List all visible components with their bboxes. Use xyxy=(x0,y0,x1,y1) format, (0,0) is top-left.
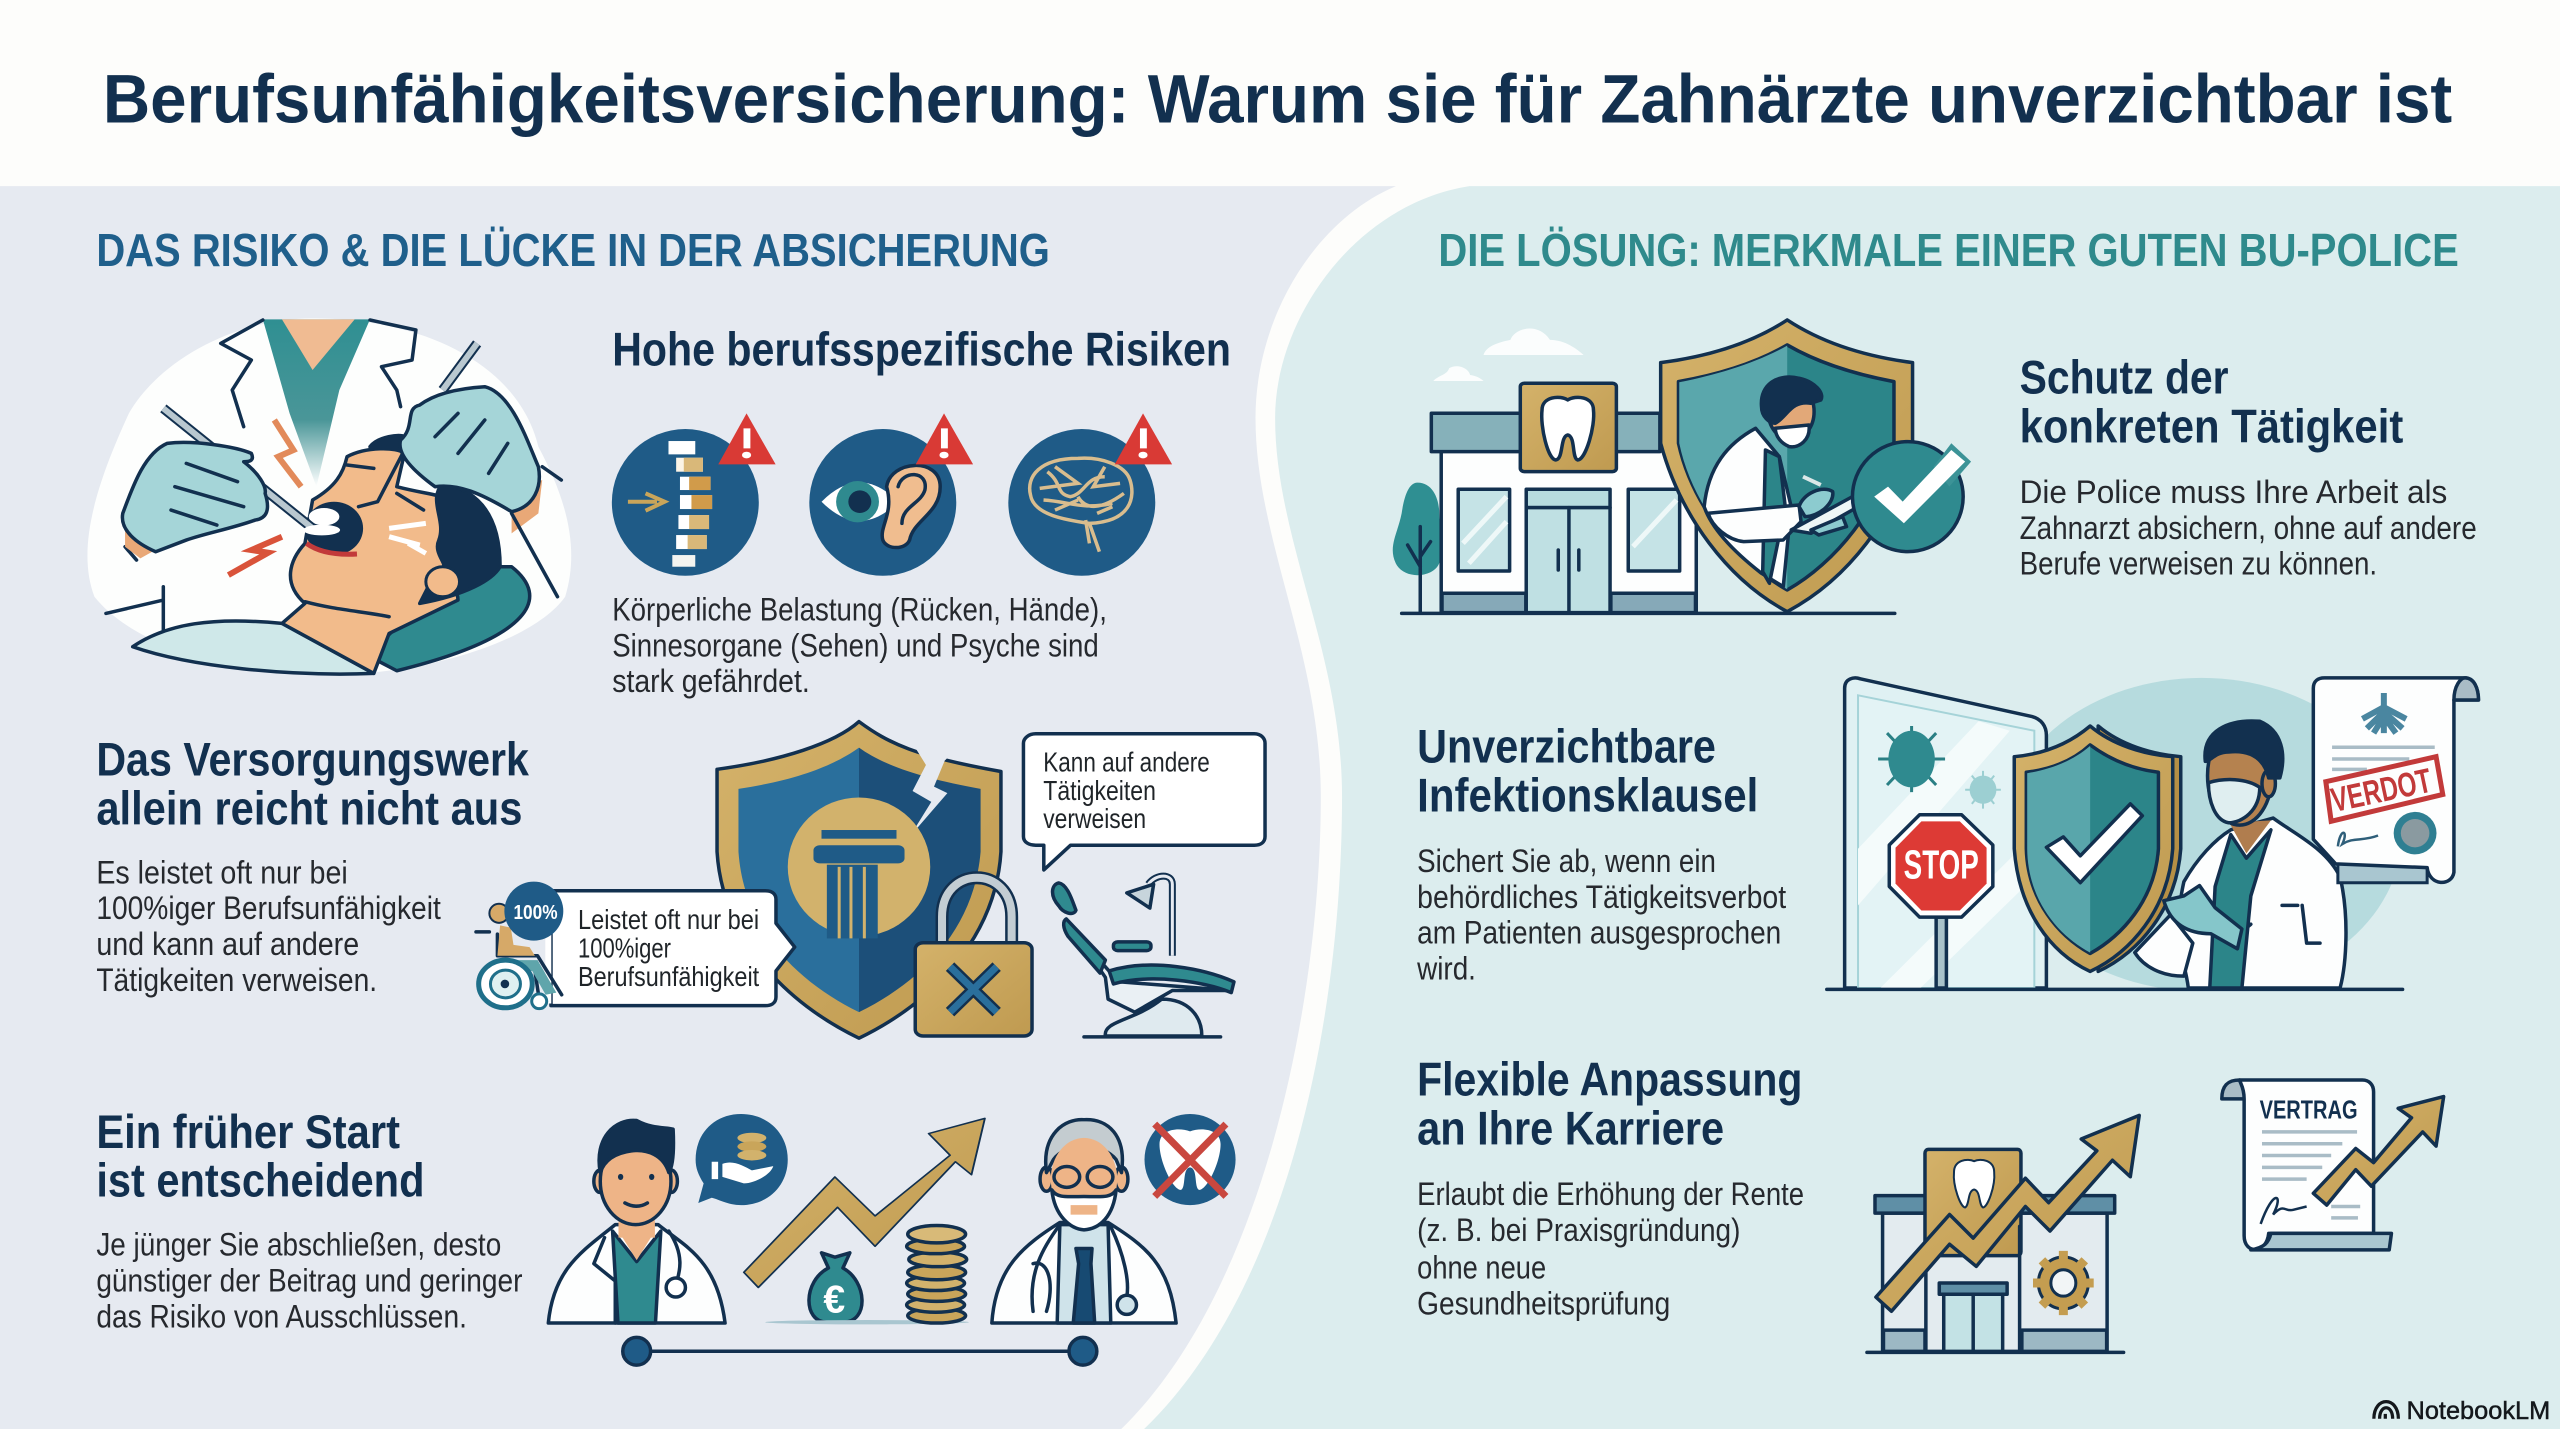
icon: money bag: € xyxy=(823,1279,845,1322)
text: Schutz der konkreten Tätigkeit: Die Police muss Ihre Arbeit als xyxy=(2020,473,2447,510)
chart: rising gold arrow xyxy=(744,1118,985,1288)
text: risks description xyxy=(612,590,1107,699)
illustration: senior dentist xyxy=(992,1120,1176,1323)
text: Unverzichtbare Infektionsklausel: Infektionsklausel xyxy=(1417,769,1758,822)
text: Unverzichtbare Infektionsklausel: Sichert Sie ab, wenn ein xyxy=(1417,842,1716,879)
icon: dental chair xyxy=(1053,876,1234,1037)
illustration: contract: VERTRAG xyxy=(2260,1094,2358,1124)
text: Das Versorgungswerk: Es leistet oft nur bei xyxy=(96,853,348,890)
text: Schutz der konkreten Tätigkeit: Zahnarzt absichern, ohne auf andere xyxy=(2020,509,2477,546)
illustration: infection clause: VERDOT xyxy=(2328,762,2435,820)
text: Ein früher Start xyxy=(96,1106,523,1334)
text: Ein früher Start: das Risiko von Ausschlüssen. xyxy=(96,1297,467,1334)
text: Flexible Anpassung: Erlaubt die Erhöhung der Rente xyxy=(1417,1175,1804,1212)
text: Flexible Anpassung: an Ihre Karriere xyxy=(1417,1102,1724,1155)
text: Flexible Anpassung: (z. B. bei Praxisgründung) xyxy=(1417,1211,1740,1248)
text: risks description: stark gefährdet. xyxy=(612,662,810,699)
icon: coin stack xyxy=(765,1225,969,1324)
callout: other activities xyxy=(1023,734,1265,870)
text: Das Versorgungswerk: Tätigkeiten verweisen. xyxy=(96,961,377,998)
illustration: broken shield with lock xyxy=(717,722,1032,1038)
heading: risk: DAS RISIKO & DIE LÜCKE IN DER ABSICHERUNG xyxy=(96,224,1050,276)
icon: brain xyxy=(1008,413,1172,576)
icon: crossed-out tooth xyxy=(1145,1114,1236,1205)
icon: saving speech bubble xyxy=(696,1114,788,1205)
text: Ein früher Start: Ein früher Start xyxy=(96,1106,400,1159)
callout: other activities: Kann auf andere xyxy=(1043,746,1210,777)
text: Unverzichtbare Infektionsklausel: wird. xyxy=(1416,950,1476,987)
text: risks description: Körperliche Belastung (Rücken, Hände), xyxy=(612,590,1107,627)
panel: solution xyxy=(1143,186,2560,1429)
text: Ein früher Start: ist entscheidend xyxy=(96,1155,424,1208)
illustration: infection clause xyxy=(1827,678,2478,1018)
text: Unverzichtbare Infektionsklausel: am Patienten ausgesprochen xyxy=(1417,914,1781,951)
panel: risk xyxy=(0,186,1396,1429)
text: Ein früher Start: Je jünger Sie abschließen, desto xyxy=(96,1226,501,1263)
text: Unverzichtbare Infektionsklausel: behördliches Tätigkeitsverbot xyxy=(1417,878,1786,915)
text: Flexible Anpassung: ohne neue xyxy=(1417,1248,1546,1285)
text: Flexible Anpassung: Gesundheitsprüfung xyxy=(1417,1284,1670,1321)
text: Das Versorgungswerk: allein reicht nicht aus xyxy=(96,782,522,835)
illustration: infection clause: STOP xyxy=(1904,841,1979,887)
text: Schutz der konkreten Tätigkeit: konkreten Tätigkeit xyxy=(2020,400,2403,453)
text: Schutz der konkreten Tätigkeit: Schutz der xyxy=(2020,351,2229,404)
text: Das Versorgungswerk: 100%iger Berufsunfähigkeit xyxy=(96,889,441,926)
illustration: practice growth arrow xyxy=(1867,1115,2139,1352)
text: Flexible Anpassung: Flexible Anpassung xyxy=(1417,1054,1802,1107)
text: Schutz der konkreten Tätigkeit xyxy=(2020,351,2477,582)
text: Ein früher Start: günstiger der Beitrag und geringer xyxy=(96,1261,523,1298)
callout: 100 percent xyxy=(476,882,795,1009)
illustration: contract xyxy=(2222,1080,2444,1250)
illustration: young dentist xyxy=(548,1120,725,1323)
text: Das Versorgungswerk: Das Versorgungswerk xyxy=(96,734,530,787)
callout: 100 percent: 100%iger xyxy=(578,933,671,964)
heading: Hohe berufsspezifische Risiken: Hohe berufsspezifische Risiken xyxy=(612,324,1231,377)
callout: 100 percent: Berufsunfähigkeit xyxy=(578,961,759,992)
callout: other activities: verweisen xyxy=(1043,803,1146,834)
text: Das Versorgungswerk: und kann auf andere xyxy=(96,925,359,962)
text: Unverzichtbare Infektionsklausel xyxy=(1416,720,1786,987)
text: Das Versorgungswerk xyxy=(96,734,530,998)
timeline xyxy=(623,1337,1097,1365)
icon: spine xyxy=(612,413,776,576)
callout: other activities: Tätigkeiten xyxy=(1043,775,1156,806)
text: Unverzichtbare Infektionsklausel: Unverzichtbare xyxy=(1417,720,1716,773)
text: Flexible Anpassung xyxy=(1417,1054,1804,1321)
icon: eye and ear xyxy=(809,413,973,576)
callout: 100 percent: Leistet oft nur bei xyxy=(578,904,759,935)
callout: 100 percent: 100% xyxy=(513,902,558,924)
illustration: dental practice with shield xyxy=(1393,320,1971,613)
icon: money bag xyxy=(809,1253,862,1322)
text: Schutz der konkreten Tätigkeit: Berufe verweisen zu können. xyxy=(2020,545,2377,582)
illustration: dentist treating patient xyxy=(87,318,571,675)
title: Berufsunfähigkeitsversicherung: Warum sie für Zahnärzte unverzichtbar ist xyxy=(103,60,2452,137)
text: risks description: Sinnesorgane (Sehen) und Psyche sind xyxy=(612,626,1099,663)
logo: NotebookLM: NotebookLM xyxy=(2407,1397,2550,1425)
